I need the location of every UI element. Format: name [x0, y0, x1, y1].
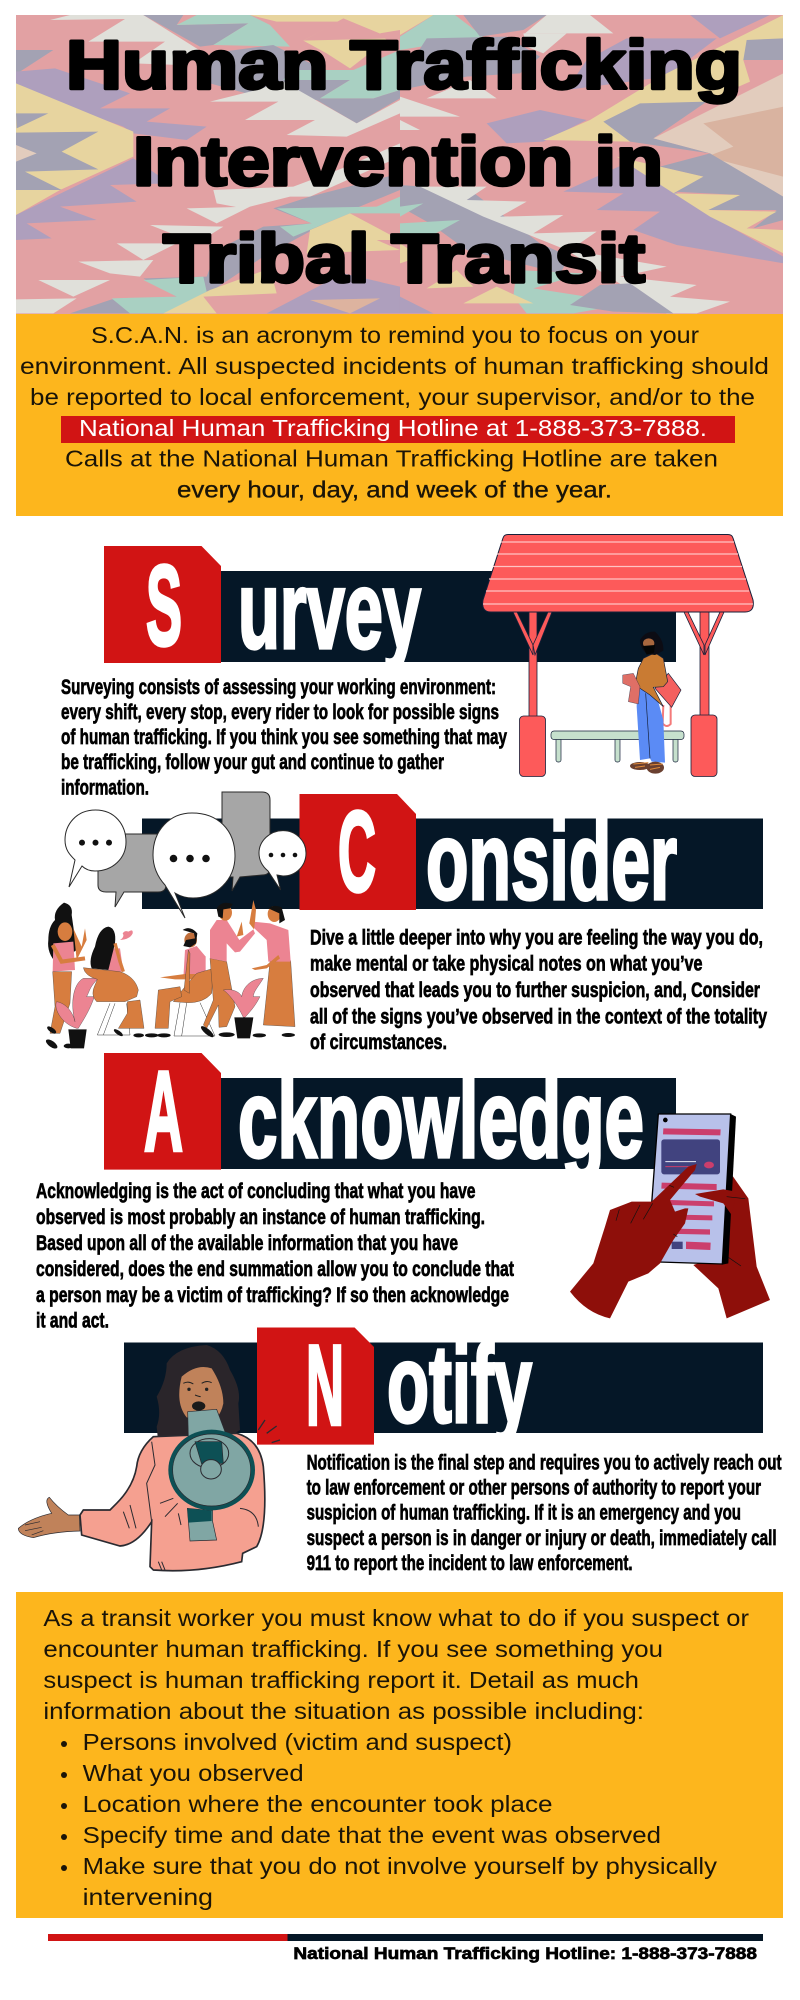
section heading: Survey [104, 543, 676, 672]
standing man [199, 903, 255, 1039]
shelter roof [483, 534, 753, 612]
body text: Survey: Surveying consists of assessing your working environment: [61, 676, 496, 699]
body text: Notify: 911 to report the incident to law enforcement. [307, 1552, 633, 1575]
body text: Survey: be trafficking, follow your gut and continue to gather [61, 751, 444, 774]
seated bearded man [145, 928, 213, 1037]
title: Intervention in [133, 123, 663, 200]
hair [157, 1345, 240, 1452]
panel: S.C.A.N. introduction [16, 314, 783, 516]
panel: S.C.A.N. introduction: Calls at the National Human Trafficking Hotline are taken [65, 446, 718, 472]
section heading: Notify [124, 1322, 763, 1450]
bullet list: Location where the encounter took place [83, 1791, 552, 1817]
panel: what to report: As a transit worker you must know what to do if you suspect or [43, 1605, 749, 1631]
hand [18, 1497, 80, 1538]
section heading: Survey: S [146, 543, 182, 670]
panel: what to report: encounter human trafficking. If you see something you [43, 1636, 663, 1662]
title [66, 27, 742, 297]
body text: Acknowledge: Based upon all of the available information that you have [36, 1232, 458, 1255]
panel: S.C.A.N. introduction: be reported to local enforcement, your supervisor, and/or to the [30, 384, 755, 410]
panel: what to report: information about the situation as possible including: [43, 1698, 644, 1724]
panel: S.C.A.N. introduction: S.C.A.N. is an acronym to remind you to focus on your [91, 322, 699, 348]
body text: Survey: of human trafficking. If you think you see something that may [61, 726, 507, 749]
rider [623, 632, 681, 774]
seated woman chair legs [97, 1003, 130, 1035]
megaphone [168, 1409, 255, 1541]
bullet list: Make sure that you do not involve yourself by physically [83, 1853, 718, 1879]
bullet list: Specify time and date that the event was observed [83, 1822, 661, 1848]
seated woman with long hair [83, 927, 144, 1037]
footer rule [48, 1934, 763, 1941]
grey speech box large [222, 792, 270, 891]
sound lines [258, 1420, 280, 1443]
shelter posts [513, 610, 724, 776]
panel: what to report [16, 1592, 783, 1918]
section heading: Acknowledge: A [144, 1048, 183, 1176]
body text: Consider [310, 927, 767, 1054]
title: Human Trafficking [66, 27, 742, 104]
body text: Acknowledge: a person may be a victim of trafficking? If so then acknowledge [36, 1284, 509, 1307]
white bubble left [65, 810, 126, 887]
body text: Consider: of circumstances. [310, 1031, 447, 1054]
section heading: Consider [142, 789, 763, 923]
grey speech box small [98, 834, 166, 907]
section heading: Notify: N [306, 1322, 344, 1450]
white bubble right [259, 831, 306, 890]
bench [551, 731, 684, 762]
body [80, 1433, 265, 1571]
bullet list: Persons involved (victim and suspect) [83, 1729, 512, 1755]
illustration: woman with megaphone [18, 1345, 280, 1571]
thumb of back hand [695, 1189, 737, 1215]
body text: Survey: information. [61, 776, 149, 800]
illustration: hands holding smartphone [570, 1114, 770, 1318]
bullet list: What you observed [83, 1760, 304, 1786]
panel: what to report: suspect is human trafficking report it. Detail as much [43, 1667, 639, 1693]
panel: S.C.A.N. introduction: every hour, day, and week of the year. [177, 477, 612, 503]
illustration: group of people talking [44, 900, 295, 1050]
body text: Acknowledge: considered, does the end summation allow you to conclude that [36, 1258, 514, 1281]
illustration: bus shelter with rider [483, 534, 753, 776]
banner: woven textile pattern [16, 15, 783, 314]
body text: Acknowledge: observed is most probably an instance of human trafficking. [36, 1206, 485, 1229]
title: Tribal Transit [163, 220, 645, 297]
body text: Acknowledge: it and act. [36, 1310, 109, 1332]
body text: Acknowledge: Acknowledging is the act of concluding that what you have [36, 1180, 476, 1203]
footer hotline text: National Human Trafficking Hotline: 1-888-373-7888 [293, 1944, 757, 1963]
body text: Notify [307, 1452, 782, 1575]
white bubble centre [153, 813, 235, 918]
hotline highlight bar: National Human Trafficking Hotline at 1-888-373-7888. [79, 415, 707, 441]
body text: Survey: every shift, every stop, every rider to look for possible signs [61, 701, 499, 724]
bullet list [61, 1729, 718, 1910]
body text: Acknowledge [36, 1180, 514, 1332]
standing woman left [44, 903, 87, 1050]
body text: Survey [61, 676, 507, 800]
plant right [223, 978, 263, 1038]
section heading: Consider: C [338, 789, 376, 916]
phone [647, 1114, 736, 1265]
section heading: Acknowledge [104, 1048, 676, 1181]
panel: S.C.A.N. introduction: environment. All suspected incidents of human trafficking should [20, 353, 769, 379]
front hand [570, 1164, 697, 1318]
section heading: Notify: otify [387, 1323, 532, 1446]
bullet list: intervening [83, 1884, 213, 1910]
icon: speech bubbles [65, 792, 306, 918]
plant left [56, 978, 98, 1048]
back hand [693, 1176, 770, 1318]
face [179, 1367, 223, 1423]
standing woman right [249, 900, 295, 1037]
section heading: Survey: urvey [238, 549, 421, 672]
